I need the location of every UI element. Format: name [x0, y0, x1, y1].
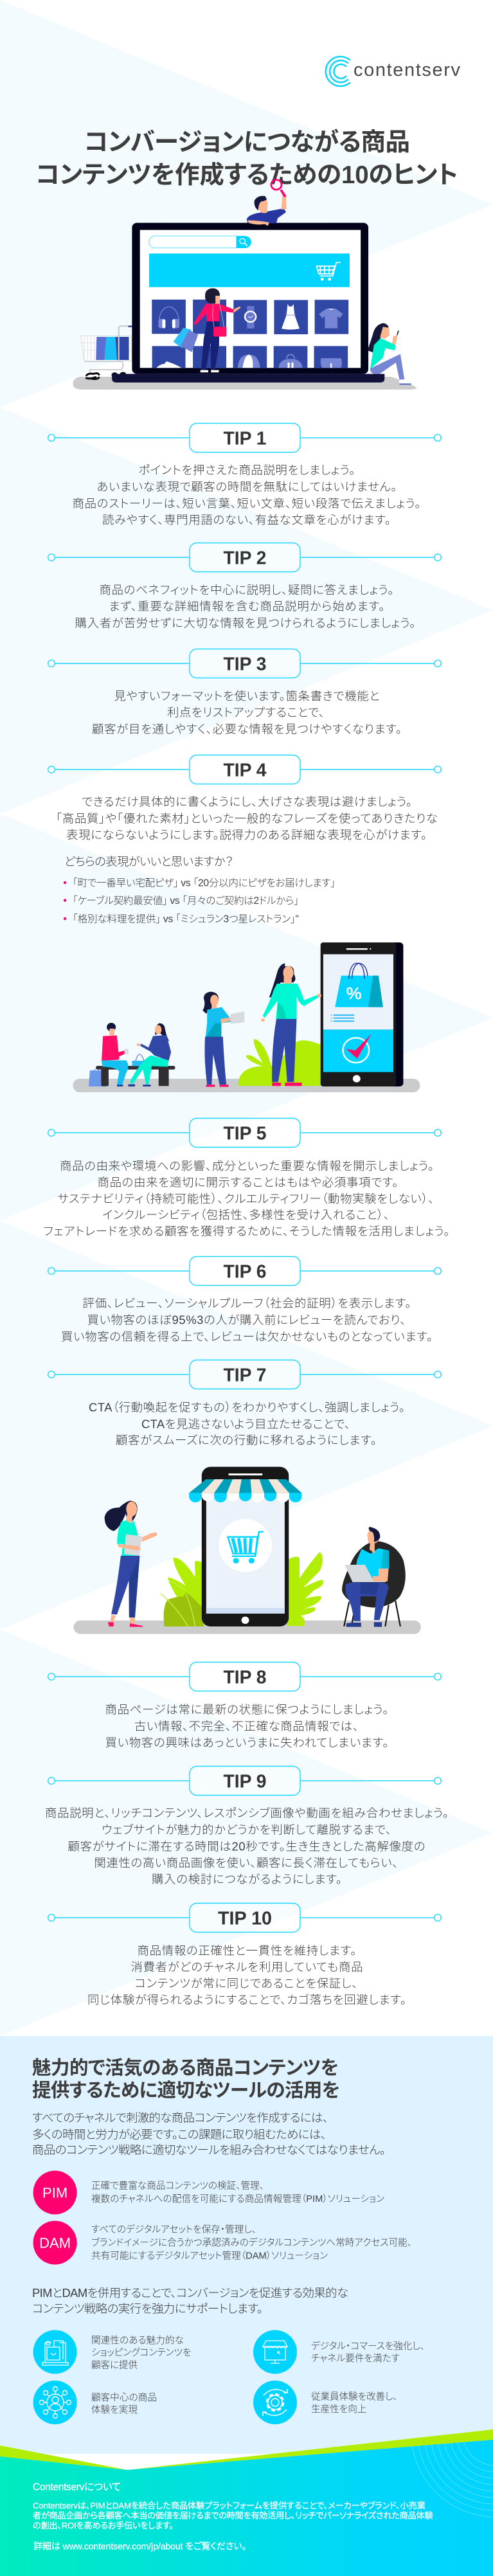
tip 5 text: 商品の由来を適切に開示することはもはや必須事項です。	[98, 1175, 399, 1189]
tip 1 text	[72, 463, 420, 527]
panel heading	[32, 2057, 340, 2101]
illustration: shoppers and smartphone	[73, 942, 420, 1092]
logo: contentserv: contentserv	[354, 60, 460, 80]
tip 9 text: 顧客がサイトに滞在する時間は20秒です。生き生きとした高解像度の	[68, 1840, 426, 1853]
benefit: digital commerce: チャネル要件を満たす	[311, 2353, 400, 2364]
tip 2 text: 購入者が苦労せずに大切な情報を見つけられるようにしましょう。	[75, 616, 415, 630]
title: コンテンツを作成するための10のヒント	[36, 161, 458, 189]
tip 6 text: 評価、レビュー、ソーシャルプルーフ（社会的証明）を表示します。	[82, 1296, 411, 1310]
floor shadow	[73, 377, 417, 390]
DAM description: 共有可能にするデジタルアセット管理（DAM）ソリューション	[91, 2250, 328, 2262]
plants	[161, 1552, 323, 1626]
tip 8 text	[105, 1702, 388, 1749]
tip 8 text: 古い情報、不完全、不正確な商品情報では、	[134, 1719, 359, 1733]
tip 9	[45, 1767, 449, 1886]
tip 7 text: CTA（行動喚起を促すもの）をわかりやすくし、強調しましょう。	[89, 1400, 405, 1414]
tip 4 heading: TIP 4	[224, 760, 266, 780]
tip 6 text	[61, 1296, 433, 1344]
tip 4 text	[56, 795, 438, 868]
tip 5 text	[44, 1159, 450, 1238]
combined use text: PIMとDAMを併用することで、コンバージョンを促進する効果的な	[32, 2286, 348, 2300]
panel intro text: 商品のコンテンツ戦略に適切なツールを組み合わせなくてはなりません。	[32, 2143, 386, 2156]
title: コンバージョンにつながる商品	[84, 129, 410, 156]
tip 7 text: CTAを見逃さないよう目立たせることで、	[141, 1417, 350, 1431]
tip 8 heading	[48, 1662, 441, 1691]
tip 9 text: 商品説明と、リッチコンテンツ、レスポンシブ画像や動画を組み合わせましょう。	[45, 1806, 449, 1819]
tip 2 text: 商品のベネフィットを中心に説明し、疑問に答えましょう。	[99, 583, 393, 597]
tip 2 text: まず、重要な詳細情報を含む商品説明から始めます。	[109, 599, 384, 613]
benefit: employee productivity: 従業員体験を改善し、	[311, 2391, 397, 2402]
tip 8 text: 商品ページは常に最新の状態に保つようにしましょう。	[105, 1702, 388, 1716]
tip 7	[48, 1360, 441, 1446]
couple on bench	[89, 1023, 175, 1086]
tip 10 text: 同じ体験が得られるようにすることで、カゴ落ちを回避します。	[87, 1993, 406, 2006]
footer about text: Contentservは、PIMとDAMを統合した商品体験プラットフォームを提供することで、メーカーやブランド、小売業	[33, 2500, 426, 2510]
PIM description: 正確で豊富な商品コンテンツの検証、管理、	[91, 2181, 264, 2191]
woman sitting with phone	[368, 323, 411, 384]
badge: PIM: PIM	[42, 2184, 67, 2201]
icon: shopping cart	[228, 1532, 264, 1563]
tip 3 heading: TIP 3	[224, 654, 266, 675]
tip 3	[48, 649, 441, 735]
woman with clipboard	[105, 1500, 157, 1627]
tip 5 heading: TIP 5	[224, 1124, 266, 1144]
awning	[189, 1479, 302, 1502]
tip 4	[48, 755, 441, 924]
combined use text	[32, 2286, 348, 2316]
tip 1 text: あいまいな表現で顧客の時間を無駄にしてはいけません。	[96, 480, 397, 494]
footer about text: の創出、ROIを高めるお手伝いをします。	[33, 2520, 174, 2530]
tip 1 heading	[48, 423, 441, 453]
tip 3 text	[92, 689, 402, 735]
benefit: shopping content	[33, 2330, 191, 2373]
tip 4 heading	[48, 755, 441, 784]
tip 9 heading	[48, 1767, 441, 1795]
tip 2 text	[75, 583, 415, 630]
large woman in teal	[261, 963, 321, 1086]
bush	[238, 1039, 321, 1086]
phone with offer: %	[346, 984, 362, 1003]
panel: tools	[0, 2036, 493, 2454]
tip 10	[48, 1903, 441, 2006]
tip 7 text	[89, 1400, 405, 1446]
badge: DAM	[33, 2220, 77, 2264]
benefit: employee productivity: 生産性を向上	[311, 2404, 366, 2415]
illustration: online store laptop with shoppers	[73, 180, 417, 390]
storefront phone	[202, 1467, 289, 1626]
tip 6 text: 買い物客の信頼を得る上で、レビューは欠かせないものとなっています。	[61, 1329, 433, 1344]
tip 3 heading	[48, 649, 441, 678]
tip 6	[48, 1256, 441, 1344]
tip 4 text: 「高品質」や「優れた素材」といった一般的なフレーズを使ってありきたりな	[56, 811, 438, 825]
benefit: shopping content: ショッピングコンテンツを	[91, 2347, 192, 2358]
combined use text: コンテンツ戦略の実行を強力にサポートします。	[32, 2301, 263, 2316]
tip 7 heading: TIP 7	[224, 1365, 266, 1386]
tip 2 heading	[48, 543, 441, 572]
tip 10 text: 消費者がどのチャネルを利用していても商品	[131, 1960, 363, 1974]
tip 9 text: ウェブサイトが魅力的かどうかを判断して離脱するまで、	[102, 1823, 391, 1836]
tip 8 text: 買い物客の興味はあっというまに失われてしまいます。	[105, 1736, 388, 1749]
tip 1	[48, 423, 441, 527]
tip 1 heading: TIP 1	[224, 428, 266, 449]
tip 5 text: サステナビリティ（持続可能性）、クルエルティフリー（動物実験をしない）、	[58, 1192, 435, 1205]
PIM description	[91, 2181, 384, 2204]
tip 7 heading	[48, 1360, 441, 1389]
floor	[73, 1079, 420, 1092]
tip 4 examples list	[64, 877, 336, 924]
tip 10 text: 商品情報の正確性と一貫性を維持します。	[138, 1944, 356, 1957]
tip 5 text: フェアトレードを求める顧客を獲得するために、そうした情報を活用しましょう。	[44, 1224, 450, 1238]
search bar	[149, 236, 251, 248]
tip 9 text: 関連性の高い商品画像を使い、顧客に長く滞在してもらい、	[94, 1856, 399, 1869]
tip 5 text: インクルーシビティ（包括性、多様性を受け入れること）、	[102, 1208, 390, 1221]
tip 10 heading	[48, 1903, 441, 1932]
benefit: customer centric: 体験を実現	[91, 2404, 138, 2415]
man in chair with laptop	[342, 1527, 406, 1627]
DAM description	[91, 2224, 412, 2262]
floor	[74, 1621, 421, 1634]
tip 10 text	[87, 1944, 406, 2006]
panel intro text: すべてのチャネルで刺激的な商品コンテンツを作成するには、	[32, 2111, 328, 2124]
tip 4 text: できるだけ具体的に書くようにし、大げさな表現は避けましょう。	[82, 795, 412, 809]
panel intro text	[32, 2111, 386, 2156]
DAM description: すべてのデジタルアセットを保存・管理し、	[91, 2224, 256, 2235]
tip 4 text: 表現にならないようにします。説得力のある詳細な表現を心がけます。	[66, 828, 427, 842]
tip 9 text: 購入の検討につながるようにします。	[152, 1872, 342, 1886]
panel heading: 魅力的で活気のある商品コンテンツを	[32, 2057, 339, 2079]
benefit: employee productivity	[253, 2381, 397, 2424]
tip 1 text: 商品のストーリーは、短い言葉、短い文章、短い段落で伝えましょう。	[72, 496, 420, 510]
phone with offer	[321, 942, 403, 1086]
man with magnifying glass	[247, 180, 287, 226]
illustration: storefront smartphone	[74, 1467, 421, 1634]
tip 4 examples list: 「ケーブル契約最安値」 vs 「月々のご契約は2ドルから」	[73, 895, 299, 906]
laptop	[112, 223, 384, 383]
tip 6 heading	[48, 1256, 441, 1286]
PIM description: 複数のチャネルへの配信を可能にする商品情報管理（PIM）ソリューション	[91, 2193, 384, 2204]
logo: contentserv	[326, 57, 460, 86]
tip 3 text: 利点をリストアップすることで、	[167, 706, 325, 719]
tip 3 text: 見やすいフォーマットを使います。箇条書きで機能と	[114, 689, 379, 703]
tip 10 heading: TIP 10	[218, 1908, 272, 1929]
tip 2 heading: TIP 2	[224, 548, 266, 568]
benefit: shopping content: 顧客に提供	[91, 2359, 138, 2371]
footer about text	[33, 2500, 433, 2530]
benefit: customer centric: 顧客中心の商品	[91, 2392, 157, 2403]
tip 5 text: 商品の由来や環境への影響、成分といった重要な情報を開示しましょう。	[60, 1159, 434, 1173]
tip 8 heading: TIP 8	[224, 1668, 266, 1688]
tip 9 text	[45, 1806, 449, 1886]
tip 7 text: 顧客がスムーズに次の行動に移れるようにします。	[116, 1434, 377, 1446]
footer heading: Contentservについて	[33, 2481, 121, 2493]
tip 8	[48, 1662, 441, 1749]
footer link text: 詳細は www.contentserv.com/jp/about をご覧ください。	[33, 2541, 247, 2551]
badge: PIM	[33, 2170, 77, 2214]
tip 10 text: コンテンツが常に同じであることを保証し、	[135, 1976, 357, 1990]
badge: DAM: DAM	[39, 2235, 71, 2251]
benefit: digital commerce	[253, 2330, 425, 2373]
woman with tablet	[202, 992, 244, 1087]
panel intro text: 多くの時間と労力が必要です。この課題に取り組むためには、	[32, 2128, 327, 2141]
panel heading: 提供するために適切なツールの活用を	[32, 2080, 340, 2101]
shopping cart	[81, 326, 132, 379]
tip 5 heading	[48, 1119, 441, 1147]
product tiles	[152, 300, 348, 368]
woman pointing at watch	[174, 288, 241, 372]
benefit: digital commerce: デジタル・コマースを強化し、	[311, 2341, 425, 2352]
tip 4 examples list: 「格別な料理を提供」 vs 「ミシュラン3つ星レストラン」"	[73, 913, 299, 924]
tip 3 text: 顧客が目を通しやすく、必要な情報を見つけやすくなります。	[92, 723, 402, 735]
cart banner	[149, 253, 350, 287]
tip 5	[44, 1119, 450, 1238]
tip 1 text: 読みやすく、専門用語のない、有益な文章を心がけます。	[102, 513, 391, 527]
footer	[0, 2429, 493, 2576]
tip 6 heading: TIP 6	[224, 1261, 266, 1282]
footer about text: 者が商品企画から各顧客へ本当の価値を届けるまでの時間を有効活用し、リッチでパーソナライズされた商品体験	[33, 2511, 433, 2520]
tip 4 text: どちらの表現がいいと思いますか？	[64, 855, 233, 868]
tip 9 heading: TIP 9	[224, 1772, 266, 1792]
DAM description: ブランドイメージに合うかつ承認済みのデジタルコンテンツへ常時アクセス可能、	[91, 2237, 412, 2248]
tip 4 examples list: 「町で一番早い宅配ピザ」 vs 「20分以内にピザをお届けします」	[73, 877, 336, 888]
tip 2	[48, 543, 441, 630]
benefit: shopping content: 関連性のある魅力的な	[91, 2335, 184, 2346]
tip 1 text: ポイントを押さえた商品説明をしましょう。	[139, 463, 355, 477]
tip 6 text: 買い物客のほぼ95%3の人が購入前にレビューを読んでおり、	[87, 1313, 406, 1327]
title	[36, 129, 458, 189]
benefit: customer centric	[33, 2381, 157, 2424]
